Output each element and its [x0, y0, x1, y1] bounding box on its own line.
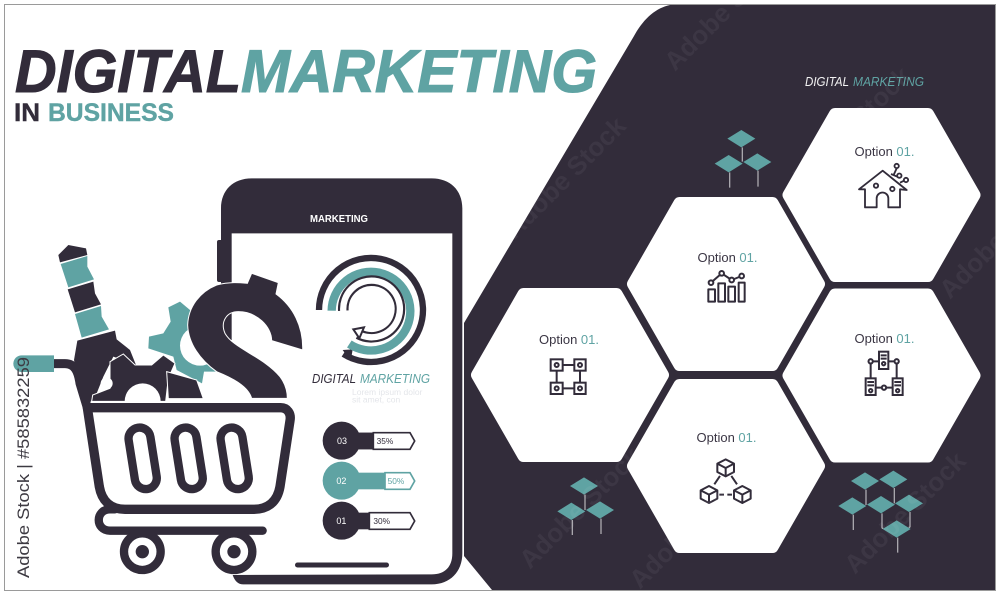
title: MARKETING: [241, 38, 597, 105]
watermark: Adobe Stock: [513, 440, 647, 574]
progress row 01: 01: [336, 516, 346, 526]
cart basket: [87, 408, 290, 509]
chart title: DIGITAL: [312, 371, 356, 386]
icon: dark gear: [92, 354, 203, 401]
icon: servers: [866, 352, 903, 395]
progress row 03: 35%: [377, 436, 394, 446]
subtitle: BUSINESS: [48, 99, 174, 127]
icon: dollar sign: [188, 273, 303, 398]
hexagon: center: [633, 203, 819, 365]
watermark: Adobe Stock: [498, 110, 632, 244]
cart tray: [99, 509, 263, 531]
icon: bar chart: [708, 271, 745, 302]
option label: top right: Option 01.: [854, 144, 914, 159]
icon: teal platforms bottom right: [838, 471, 923, 553]
progress row 03: [323, 422, 415, 460]
hexagon: right: [788, 294, 974, 456]
progress row 02: 02: [336, 476, 346, 486]
left wheel: [124, 533, 161, 570]
phone: [221, 178, 462, 584]
phone body: [221, 178, 462, 584]
title: DIGITAL: [15, 38, 241, 105]
phone home bar: [295, 562, 389, 568]
hexagon: top right: [788, 114, 974, 276]
icon: teal gear: [148, 302, 220, 383]
icon: flow nodes: [551, 359, 586, 394]
option label: bottom: Option 01.: [696, 430, 756, 445]
chart caption: sit amet, con: [352, 394, 400, 404]
chart caption: [352, 387, 423, 404]
watermark: Adobe Stock: [838, 445, 972, 579]
chart title: [312, 371, 430, 386]
icon: teal platforms bottom left: [557, 477, 614, 535]
cart handle: [13, 355, 54, 372]
phone side button: [217, 240, 223, 282]
chart caption: Lorem ipsum dolor: [352, 387, 423, 397]
option label: center: Option 01.: [698, 250, 758, 265]
progress row 03: 03: [337, 436, 347, 446]
option label: right: Option 01.: [854, 331, 914, 346]
cart slots: [127, 426, 158, 491]
circular chart: [319, 258, 423, 362]
watermark: Adobe Stock: [783, 60, 917, 194]
stock id text: Adobe Stock | #585832259: [14, 357, 33, 578]
panel heading: DIGITAL: [805, 74, 849, 89]
icon: connected cubes: [701, 459, 751, 503]
hexagon: bottom: [633, 385, 819, 547]
icon: smart home: [859, 164, 908, 207]
icon: tool handle stack: [58, 245, 136, 403]
hexagon: left: [477, 294, 663, 456]
progress row 01: 30%: [373, 516, 391, 526]
watermark: Adobe Stock: [623, 460, 757, 594]
option label: left: Option 01.: [539, 332, 599, 347]
panel: dark background: [464, 5, 995, 590]
phone header label: MARKETING: [310, 213, 368, 225]
panel heading: [805, 74, 924, 89]
icon: shopping cart: [13, 355, 290, 570]
icon: teal platforms top: [715, 130, 771, 188]
panel heading: MARKETING: [853, 74, 924, 89]
title: [15, 38, 597, 105]
progress row 01: [323, 502, 415, 540]
subtitle: IN: [14, 99, 40, 127]
right wheel: [216, 533, 252, 570]
progress row 02: [323, 462, 415, 500]
watermark: [498, 0, 1000, 594]
chart title: MARKETING: [360, 371, 430, 386]
progress row 02: 50%: [388, 476, 405, 486]
